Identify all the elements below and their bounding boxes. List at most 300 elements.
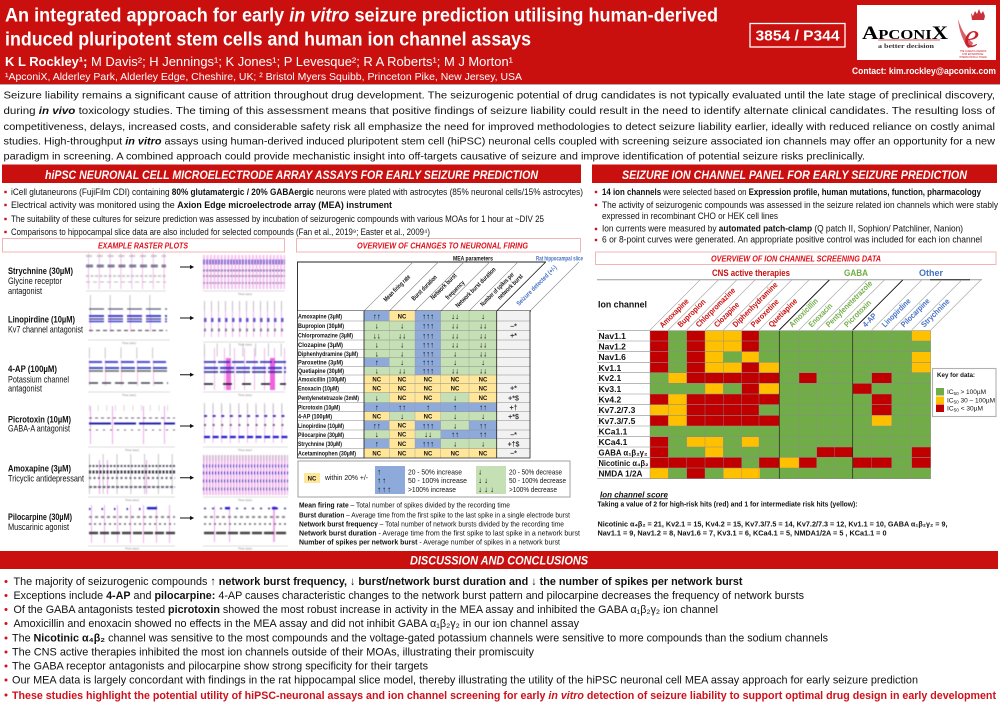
heatmap header: Pentylenetetrazole — [824, 279, 875, 329]
introduction text: during in vivo toxicology studies. The timing of this assessment means that positive findings of seizure liability could result in the need to identify alternate clinical candidates. The resulting loss of — [4, 106, 995, 117]
row: Picrotoxin: ↑ — [375, 403, 379, 412]
heatmap header: Enoxacin — [807, 301, 834, 329]
heatmap header: Amoxicillin — [787, 297, 820, 329]
heatmap header: Amoxapine — [658, 296, 691, 330]
raster: 4-AP after — [203, 350, 286, 397]
row: Pilocarpine: ↓ — [375, 430, 379, 439]
label: 4-AP: 4-AP (100µM) — [8, 364, 57, 374]
row: Strychnine: +†$ — [508, 441, 520, 448]
row: Pilocarpine: ↑↑ — [479, 430, 487, 439]
row: Acetaminophen: NC — [424, 451, 433, 457]
row: 4-AP: NC — [372, 414, 382, 420]
definitions — [299, 501, 581, 546]
row: Pentylenetetrazole: Pentylenetetrazole (3mM) — [298, 395, 359, 402]
row: Chlorpromazine: ↑↑↑ — [422, 331, 434, 340]
row: Chlorpromazine: ↓↓ — [479, 331, 487, 340]
legend: IC50 key: 50 — [954, 400, 959, 404]
ion channel score: Ion channel score — [600, 489, 668, 499]
row: Bupropion — [298, 321, 517, 331]
table header: MEA parameters: Rat hippocampal slice — [536, 256, 583, 263]
table: MEA results — [297, 311, 530, 458]
row: Kv4.2 — [598, 394, 892, 405]
heatmap header: Paroxetine — [749, 297, 781, 329]
legend: IC50 key: < 30µM — [959, 406, 983, 412]
conclusions list: The GABA receptor antagonists and pilocarpine show strong specificity for their targets — [12, 661, 428, 673]
row: Nav1.2 — [598, 341, 759, 352]
heatmap header: Chlorpromazine — [694, 286, 738, 329]
row: NMDA — [598, 468, 760, 479]
raster: Strychnine after — [203, 262, 285, 296]
label: 4-AP: Potassium channel — [8, 375, 69, 385]
legend: IC50 key: > 100µM — [959, 389, 986, 396]
row: Strychnine: ↓ — [481, 440, 485, 448]
conclusions list — [4, 576, 996, 702]
table header: MEA parameters: Number of spikes per — [479, 271, 516, 308]
row: Kv7.3/7.5: Kv7.3/7.5 — [598, 416, 636, 426]
row: Linopirdine: Linopirdine (10µM) — [298, 423, 344, 430]
row: Strychnine — [298, 439, 520, 448]
row: Bupropion: ↓ — [375, 322, 379, 331]
definitions: Mean firing rate – Total number of spikes divided by the recording time — [299, 501, 510, 510]
legend: arrow key: >100% increase — [408, 485, 456, 494]
row: Pilocarpine: Pilocarpine (30µM) — [298, 432, 344, 439]
ion channel score: Nav1.1 = 9, Nav1.2 = 8, Nav1.6 = 7, Kv3.1 = 6, KCa4.1 = 5, NMDA1/2A = 5 , KCa1.1 = 0 — [598, 529, 886, 538]
row: Nav1.2: Nav1.2 — [598, 342, 626, 352]
row: Diphenhydramine: ↓ — [453, 349, 457, 358]
legend: arrow key: 50 - 100% increase — [408, 476, 467, 485]
row: Picrotoxin: ↑ — [453, 403, 457, 412]
conclusions list: Amoxicillin and enoxacin showed no effects in the MEA assay and did not inhibit GABA α₁β₂γ₂ in our ion channel assay — [14, 618, 579, 630]
row: Clozapine — [298, 340, 497, 350]
conclusions list: Exceptions include 4-AP and pilocarpine: 4-AP causes characteristic changes to the network burst pattern and pilocarpine decreases the frequency of network bursts — [14, 590, 804, 602]
row: Amoxapine: ↑↑ — [373, 312, 381, 321]
row: Picrotoxin: Picrotoxin (10µM) — [298, 405, 340, 412]
raster: Pilocarpine after: Time (sec) — [238, 546, 252, 550]
legend: arrow key: ↓ — [478, 468, 482, 476]
affiliations: ¹ApconiX, Alderley Park, Alderley Edge, Cheshire, UK; ² Bristol Myers Squibb, Princeton Pike, New Jersey, USA — [5, 72, 522, 83]
row: Pentylenetetrazole — [298, 393, 519, 403]
raster: 4-AP after: Time (sec) — [238, 393, 252, 397]
raster: Picrotoxin before: Time (sec) — [125, 448, 139, 452]
row: Chlorpromazine: +* — [510, 333, 517, 340]
row: Diphenhydramine — [298, 349, 497, 358]
row: Pentylenetetrazole: ↓ — [453, 394, 457, 403]
row: Quetiapine: ↓↓ — [479, 367, 487, 376]
panel: hiPSC MEA assays — [2, 164, 583, 550]
ion channel score: Taking a value of 2 for high-risk hits (red) and 1 for intermediate risk hits (yellow): — [598, 500, 858, 509]
conclusions list: The majority of seizurogenic compounds ↑ network burst frequency, ↓ burst/network burst duration and ↓ the number of spikes per network burst — [14, 576, 743, 588]
label: Linopirdine: Linopirdine (10µM) — [8, 315, 75, 325]
bullet list: MEA methods: Electrical activity was monitored using the Axion Edge microelectrode array (MEA) instrument — [11, 200, 392, 210]
row: Linopirdine: ↑↑ — [373, 421, 381, 430]
logo panel — [857, 5, 996, 60]
heatmap header: Clozapine — [712, 300, 741, 329]
row: Pentylenetetrazole: ↓ — [375, 394, 379, 403]
heading: MEA assays: hiPSC NEURONAL CELL MICROELECTRODE ARRAY ASSAYS FOR EARLY SEIZURE PREDICTION — [45, 168, 538, 182]
legend: IC50 key: Key for data: — [937, 372, 975, 379]
row: Diphenhydramine: ↓↓ — [479, 349, 487, 358]
heatmap header: CNS active therapies — [712, 267, 790, 278]
row: GABA: GABA α₁β₂γ₂ — [598, 447, 648, 457]
row: Linopirdine: ↓ — [453, 421, 457, 430]
legend: arrow key: ↓↓↓ — [478, 485, 496, 494]
row: Quetiapine — [298, 367, 497, 376]
logo: ApconiX: APCONI X — [862, 23, 948, 44]
legend: IC50 key: IC — [947, 389, 953, 396]
row: Linopirdine: ↑↑ — [479, 421, 487, 430]
bullet list: ion channel methods: 14 ion channels were selected based on Expression profile, human mutations, function, pharmacology — [602, 187, 981, 197]
introduction text: paradigm in screening. A combined approach could provide mechanistic insight into off-targets causative of seizure and improve identification of potential seizure risks preclinically. — [4, 152, 865, 162]
legend: arrow key: >100% decrease — [509, 485, 557, 494]
icon: Queen's award emblem: FOR ENTERPRISE: — [962, 53, 984, 56]
header banner — [0, 0, 1000, 85]
raster: Amoxapine after — [203, 458, 288, 502]
row: Acetaminophen: NC — [372, 451, 382, 457]
label: Picrotoxin: Picrotoxin (10µM) — [8, 415, 71, 425]
arrow: Strychnine — [180, 266, 193, 268]
bullet list: MEA methods: The suitability of these cultures for seizure prediction was assessed by incubation of seizurogenic compounds with various MOAs for 1 hour at ~DIV 25 — [11, 214, 544, 224]
raster: Picrotoxin after — [203, 408, 288, 452]
label: Linopirdine — [8, 315, 83, 335]
row: Amoxicillin: NC — [451, 378, 460, 384]
row: Kv2.1: Kv2.1 — [598, 373, 621, 383]
row: Kv7.2/7.3 — [598, 405, 892, 415]
row: Pilocarpine — [298, 430, 517, 439]
row: GABA — [598, 447, 931, 457]
row: Strychnine: ↑↑↑ — [422, 440, 434, 448]
row: Paroxetine: ↓ — [481, 358, 485, 367]
row: Kv7.2/7.3: Kv7.2/7.3 — [598, 405, 636, 415]
legend: IC50 key: 30 – 100µM — [959, 398, 995, 404]
row: Strychnine: ↑ — [375, 440, 379, 448]
row: Kv1.1 — [598, 362, 931, 373]
row: Clozapine: Clozapine (3µM) — [298, 342, 343, 349]
raster: 4-AP before — [88, 353, 170, 397]
row: Enoxacin: +* — [510, 386, 517, 393]
raster: Linopirdine after: Time (sec) — [238, 342, 252, 346]
row: Quetiapine: Quetiapine (30µM) — [298, 368, 344, 375]
row: Strychnine: NC — [398, 442, 407, 448]
row: Paroxetine: ↓ — [453, 358, 457, 367]
row: Amoxapine: NC — [398, 314, 407, 320]
label: Linopirdine: Kv7 channel antagonist — [8, 325, 83, 335]
row: Diphenhydramine: Diphenhydramine (3µM) — [298, 351, 358, 358]
row: 4-AP: NC — [424, 414, 433, 420]
poster number box: 3854 / P344 — [756, 29, 840, 45]
row: Pentylenetetrazole: NC — [424, 396, 433, 402]
row: Amoxicillin: NC — [398, 378, 407, 384]
raster: Linopirdine before — [88, 305, 170, 345]
row: Bupropion: Bupropion (30µM) — [298, 323, 344, 330]
row: Pilocarpine: –* — [510, 432, 517, 439]
row: KCa1.1: KCa1.1 — [598, 426, 628, 436]
row: Nav1.1 — [598, 331, 931, 341]
legend: IC50 key — [932, 368, 996, 416]
raster: Pilocarpine before — [88, 507, 175, 550]
row: Bupropion: ↓ — [400, 322, 404, 331]
legend: arrow key: 50 - 100% decrease — [509, 476, 566, 485]
panel: discussion and conclusions — [0, 551, 998, 702]
arrow: Pilocarpine — [180, 516, 193, 520]
row: NMDA: NMDA 1/2A — [598, 468, 642, 478]
heatmap header: Bupropion — [676, 297, 708, 329]
row: Amoxicillin: NC — [479, 378, 488, 384]
subheading: overview of ion channel screening data: OVERVIEW OF ION CHANNEL SCREENING DATA — [711, 254, 881, 264]
row: Quetiapine: ↓↓ — [451, 367, 459, 376]
heatmap header: Picrotoxin — [842, 298, 873, 329]
raster: Picrotoxin before — [88, 406, 175, 452]
label: 4-AP — [8, 364, 69, 394]
row: Pilocarpine: NC — [398, 433, 407, 439]
heading: discussion — [0, 551, 998, 569]
contact: Contact: kim.rockley@apconix.com — [852, 66, 996, 76]
heatmap header: Pilocarpine — [899, 296, 932, 329]
row: Amoxicillin — [298, 375, 497, 384]
introduction text — [4, 91, 996, 162]
row: Amoxicillin: Amoxicillin (100µM) — [298, 377, 346, 384]
table header: MEA parameters: network burst — [496, 273, 525, 301]
subheading: overview of changes: OVERVIEW OF CHANGES TO NEURONAL FIRING — [357, 240, 528, 250]
legend: arrow key — [298, 461, 570, 497]
row: Quetiapine: ↓ — [375, 367, 379, 376]
heatmap header: Diphenhydramine — [731, 280, 780, 329]
row: Clozapine: ↓ — [400, 341, 404, 350]
row: Enoxacin: NC — [372, 386, 382, 392]
label: Strychnine: Glycine receptor — [8, 276, 62, 286]
row: Pentylenetetrazole: NC — [479, 396, 488, 402]
row: Clozapine: ↑↑↑ — [422, 341, 434, 350]
raster: Linopirdine before: Time (sec) — [122, 341, 136, 345]
label: Picrotoxin: GABA-A antagonist — [8, 424, 70, 434]
label: Picrotoxin — [8, 415, 71, 434]
arrow: Linopirdine — [180, 316, 193, 320]
label: Amoxapine — [8, 464, 84, 484]
bullet list: MEA methods — [4, 187, 583, 237]
raster: Pilocarpine before: Time (sec) — [125, 546, 139, 550]
row: Pilocarpine: ↓↓ — [424, 430, 432, 439]
row: KCa4.1 — [598, 437, 759, 447]
row: Strychnine: ↓ — [453, 440, 457, 448]
row: Nav1.1: Nav1.1 — [598, 331, 626, 341]
heatmap header: Linopirdine — [880, 296, 913, 329]
conclusions list: The CNS active therapies inhibited the most ion channels outside of their MOAs, illustrating their promiscuity — [12, 647, 534, 659]
row: Picrotoxin: ↑↑ — [398, 403, 406, 412]
legend: IC50 key: 50 — [953, 391, 959, 396]
label: Strychnine: antagonist — [8, 286, 42, 296]
raster: Picrotoxin after: Time (sec) — [238, 448, 252, 452]
table header: MEA parameters: Burst duration — [410, 274, 439, 302]
ion channel score: Nicotinic α₄β₂ = 21, Kv2.1 = 15, Kv4.2 = 15, Kv7.3/7.5 = 14, Kv7.2/7.3 = 12, Kv1.1 = 10, GABA α₁β₂γ₂ = 9, — [598, 520, 948, 529]
legend: IC50 key: IC — [947, 406, 953, 412]
row: Chlorpromazine: ↓↓ — [451, 331, 459, 340]
row: Nav1.6 — [598, 352, 931, 362]
bullet list: ion channel methods — [595, 187, 999, 245]
row: Paroxetine — [298, 358, 497, 367]
bullet list: MEA methods: Comparisons to hippocampal slice data are also included for selected compounds (Fan et al., 2019⁹; Easter et al., 2009⁴) — [11, 227, 430, 237]
label: Pilocarpine: Muscarinic agonist — [8, 522, 69, 532]
introduction text: competitiveness, delays, increased costs, and considerable safety risk all emphasize the need for improved methodologies to detect seizure liability earlier, ideally with reduced reliance on costly animal — [4, 122, 995, 133]
row: KCa4.1: KCa4.1 — [598, 437, 628, 447]
icon: Queen's award emblem — [958, 9, 987, 59]
row: Picrotoxin — [298, 403, 518, 412]
row: Acetaminophen: NC — [398, 451, 407, 457]
title: induced pluripotent stem cells and human ion channel assays — [5, 30, 531, 51]
heading: MEA assays — [2, 164, 581, 183]
row: Linopirdine — [298, 421, 497, 430]
subheading: example raster plots — [2, 238, 284, 252]
legend: arrow key: ↑↑ — [377, 476, 387, 485]
logo: ApconiX: a better decision — [878, 43, 934, 50]
row: Linopirdine: NC — [398, 424, 407, 430]
row: Kv4.2: Kv4.2 — [598, 394, 621, 404]
raster: Linopirdine after — [203, 306, 285, 346]
heading: ion channel panel: SEIZURE ION CHANNEL PANEL FOR EARLY SEIZURE PREDICTION — [622, 168, 967, 182]
introduction text: studies. High-throughput in vitro assays using human-derived induced pluripotent stem cell (hiPSC) neuronal cells coupled with screening seizure associated ion channels may offer an opportunity for a new — [4, 137, 996, 148]
row: Kv3.1 — [598, 383, 872, 394]
title — [5, 6, 718, 51]
row: Enoxacin: NC — [451, 386, 460, 392]
arrow: Picrotoxin — [180, 424, 193, 428]
heatmap header: Other — [919, 267, 943, 278]
panel: seizure ion channel panel — [592, 164, 999, 538]
icon: Queen's award emblem: THE QUEEN'S AWARDS — [960, 50, 987, 53]
conclusions list: These studies highlight the potential utility of hiPSC-neuronal assays and ion channel screening for early in vitro detection of seizure liability to support optimal drug design in early development — [12, 690, 996, 702]
row: Chlorpromazine: Chlorpromazine (3µM) — [298, 333, 353, 340]
poster number box — [750, 24, 845, 47]
row: Quetiapine: ↑↑↑ — [422, 367, 434, 376]
row: Paroxetine: ↓ — [400, 358, 404, 367]
row: Nicotinic — [598, 457, 931, 468]
conclusions list: Of the GABA antagonists tested picrotoxin showed the most robust increase in activity in the MEA assay and inhibited the GABA α₁β₂γ₂ ion channel — [14, 604, 718, 616]
row: Enoxacin: Enoxacin (10µM) — [298, 386, 339, 393]
table header: MEA parameters: MEA parameters — [453, 256, 493, 263]
row: Amoxicillin: NC — [372, 378, 382, 384]
raster: Amoxapine before — [88, 460, 175, 502]
label: Strychnine: Strychnine (30µM) — [8, 266, 73, 276]
label: 4-AP: antagonist — [8, 384, 42, 394]
legend: arrow key: ↑ — [377, 468, 381, 476]
row: 4-AP: ↓ — [400, 412, 404, 421]
conclusions list: The Nicotinic α₄β₂ channel was sensitive to the most compounds and the voltage-gated potassium channels were sensitive to more compounds than the sodium channels — [12, 633, 828, 645]
title: An integrated approach for early in vitro seizure prediction utilising human-derived — [5, 6, 718, 27]
row: 4-AP: 4-AP (100µM) — [298, 414, 332, 421]
row: Clozapine: ↓ — [375, 341, 379, 350]
row: Enoxacin: NC — [398, 386, 407, 392]
label: Pilocarpine: Pilocarpine (30µM) — [8, 512, 72, 522]
ion channel score — [598, 489, 948, 538]
row: Diphenhydramine: ↑↑↑ — [422, 349, 434, 358]
row: Chlorpromazine: ↓↓ — [398, 331, 406, 340]
row: Enoxacin — [298, 384, 517, 393]
label: Amoxapine: Tricyclic antidepressant — [8, 474, 84, 484]
panel: example raster plots — [2, 238, 288, 550]
row: Bupropion: ↑↑↑ — [422, 322, 434, 331]
table header: MEA parameters — [297, 256, 583, 311]
table header: MEA parameters: frequency — [444, 279, 467, 301]
row: Picrotoxin: ↑ — [426, 403, 430, 412]
label: Pilocarpine — [8, 512, 72, 532]
raster: Pilocarpine after — [203, 506, 288, 550]
table header: MEA parameters: Network burst — [429, 272, 459, 301]
icon: Queen's award emblem: e — [964, 18, 979, 55]
subheading: overview of ion channel screening data — [596, 252, 996, 264]
row: 4-AP: ↓ — [481, 412, 485, 421]
row: Nav1.6: Nav1.6 — [598, 352, 626, 362]
legend: IC50 key: IC — [947, 398, 953, 404]
row: Pentylenetetrazole: NC — [398, 396, 407, 402]
row: Amoxapine: ↓ — [481, 312, 485, 321]
raster: Strychnine before — [86, 256, 166, 291]
row: Nicotinic: Nicotinic α₄β₂ — [598, 458, 649, 468]
definitions: Network burst frequency – Total number of network bursts divided by the recording time — [299, 520, 564, 529]
row: 4-AP: +*$ — [508, 414, 519, 421]
heatmap header: Strychnine — [919, 297, 952, 329]
row: Pentylenetetrazole: +*$ — [508, 396, 519, 402]
introduction text: Seizure liability remains a significant cause of attrition throughout drug development. The seizurogenic potential of drug candidates is not typically evaluated until the late stage of preclinical discovery, — [4, 91, 995, 102]
heading: discussion: DISCUSSION AND CONCLUSIONS — [410, 554, 588, 568]
raster: Amoxapine before: Time (sec) — [125, 498, 139, 502]
row: Paroxetine: Paroxetine (3µM) — [298, 360, 343, 366]
subheading: overview of changes — [296, 238, 580, 252]
row: Amoxapine — [298, 311, 497, 321]
row: Amoxicillin: NC — [424, 378, 433, 384]
row: 4-AP: ↓ — [453, 412, 457, 421]
row: Amoxapine: ↑↑↑ — [422, 312, 434, 321]
arrow: 4-AP — [180, 373, 193, 376]
table header: MEA parameters: Mean firing rate — [382, 274, 412, 303]
bullet list: ion channel methods: 6 or 8-point curves were generated. An appropriate positive control was included for each ion channel — [602, 235, 982, 245]
row: Clozapine: ↓↓ — [451, 341, 459, 350]
heatmap: ion channel screening — [597, 331, 931, 479]
heatmap header: GABA — [844, 267, 868, 278]
heatmap header: Quetiapine — [767, 296, 800, 329]
conclusions list: Our MEA data is largely concordant with findings in the rat hippocampal slice model, thereby illustrating the utility of the hiPSC neuronal cell MEA assay approach for early seizure prediction — [12, 675, 918, 687]
row: Bupropion: ↓↓ — [479, 322, 487, 331]
definitions: Burst duration – Average time from the first spike to the last spike in a single electrode burst — [299, 511, 571, 520]
row: Paroxetine: ↑↑↑ — [422, 358, 434, 367]
label: Strychnine — [8, 266, 73, 296]
row: Kv3.1: Kv3.1 — [598, 384, 621, 394]
row: Acetaminophen — [298, 448, 517, 458]
icon: Queen's award emblem: INTERNATIONAL TRADE — [959, 56, 987, 59]
row: Pilocarpine: ↑↑ — [451, 430, 459, 439]
legend: arrow key: 20 - 50% increase — [408, 468, 462, 476]
row: Amoxapine: Amoxapine (3µM) — [298, 313, 342, 320]
raster: Strychnine after: Time (sec) — [238, 292, 252, 296]
row: Picrotoxin: +† — [510, 405, 518, 412]
panel: overview of changes to neuronal firing — [296, 238, 583, 546]
row: Kv7.3/7.5 — [598, 415, 892, 426]
row: Acetaminophen: Acetaminophen (30µM) — [298, 450, 356, 458]
row: Quetiapine: ↓↓ — [398, 367, 406, 376]
row: Paroxetine: ↑ — [375, 358, 379, 367]
row: Bupropion: ↓↓ — [451, 322, 459, 331]
row: Amoxapine: ↓↓ — [451, 312, 459, 321]
row: Picrotoxin: ↑↑ — [479, 403, 487, 412]
row: Chlorpromazine — [298, 331, 517, 340]
row: Strychnine: Strychnine (30µM) — [298, 441, 342, 448]
row: Clozapine: ↓↓ — [479, 341, 487, 350]
row: Kv1.1: Kv1.1 — [598, 363, 621, 373]
raster: Amoxapine after: Time (sec) — [238, 498, 252, 502]
row: Diphenhydramine: ↓ — [400, 349, 404, 358]
row: Kv2.1 — [598, 373, 892, 383]
heatmap header: Ion channel — [598, 300, 647, 311]
row: 4-AP — [298, 412, 519, 421]
row: Linopirdine: ↑↑↑ — [422, 421, 434, 430]
definitions: Number of spikes per network burst - Average number of spikes in a network burst — [299, 537, 561, 546]
label: Amoxapine: Amoxapine (3µM) — [8, 464, 71, 474]
